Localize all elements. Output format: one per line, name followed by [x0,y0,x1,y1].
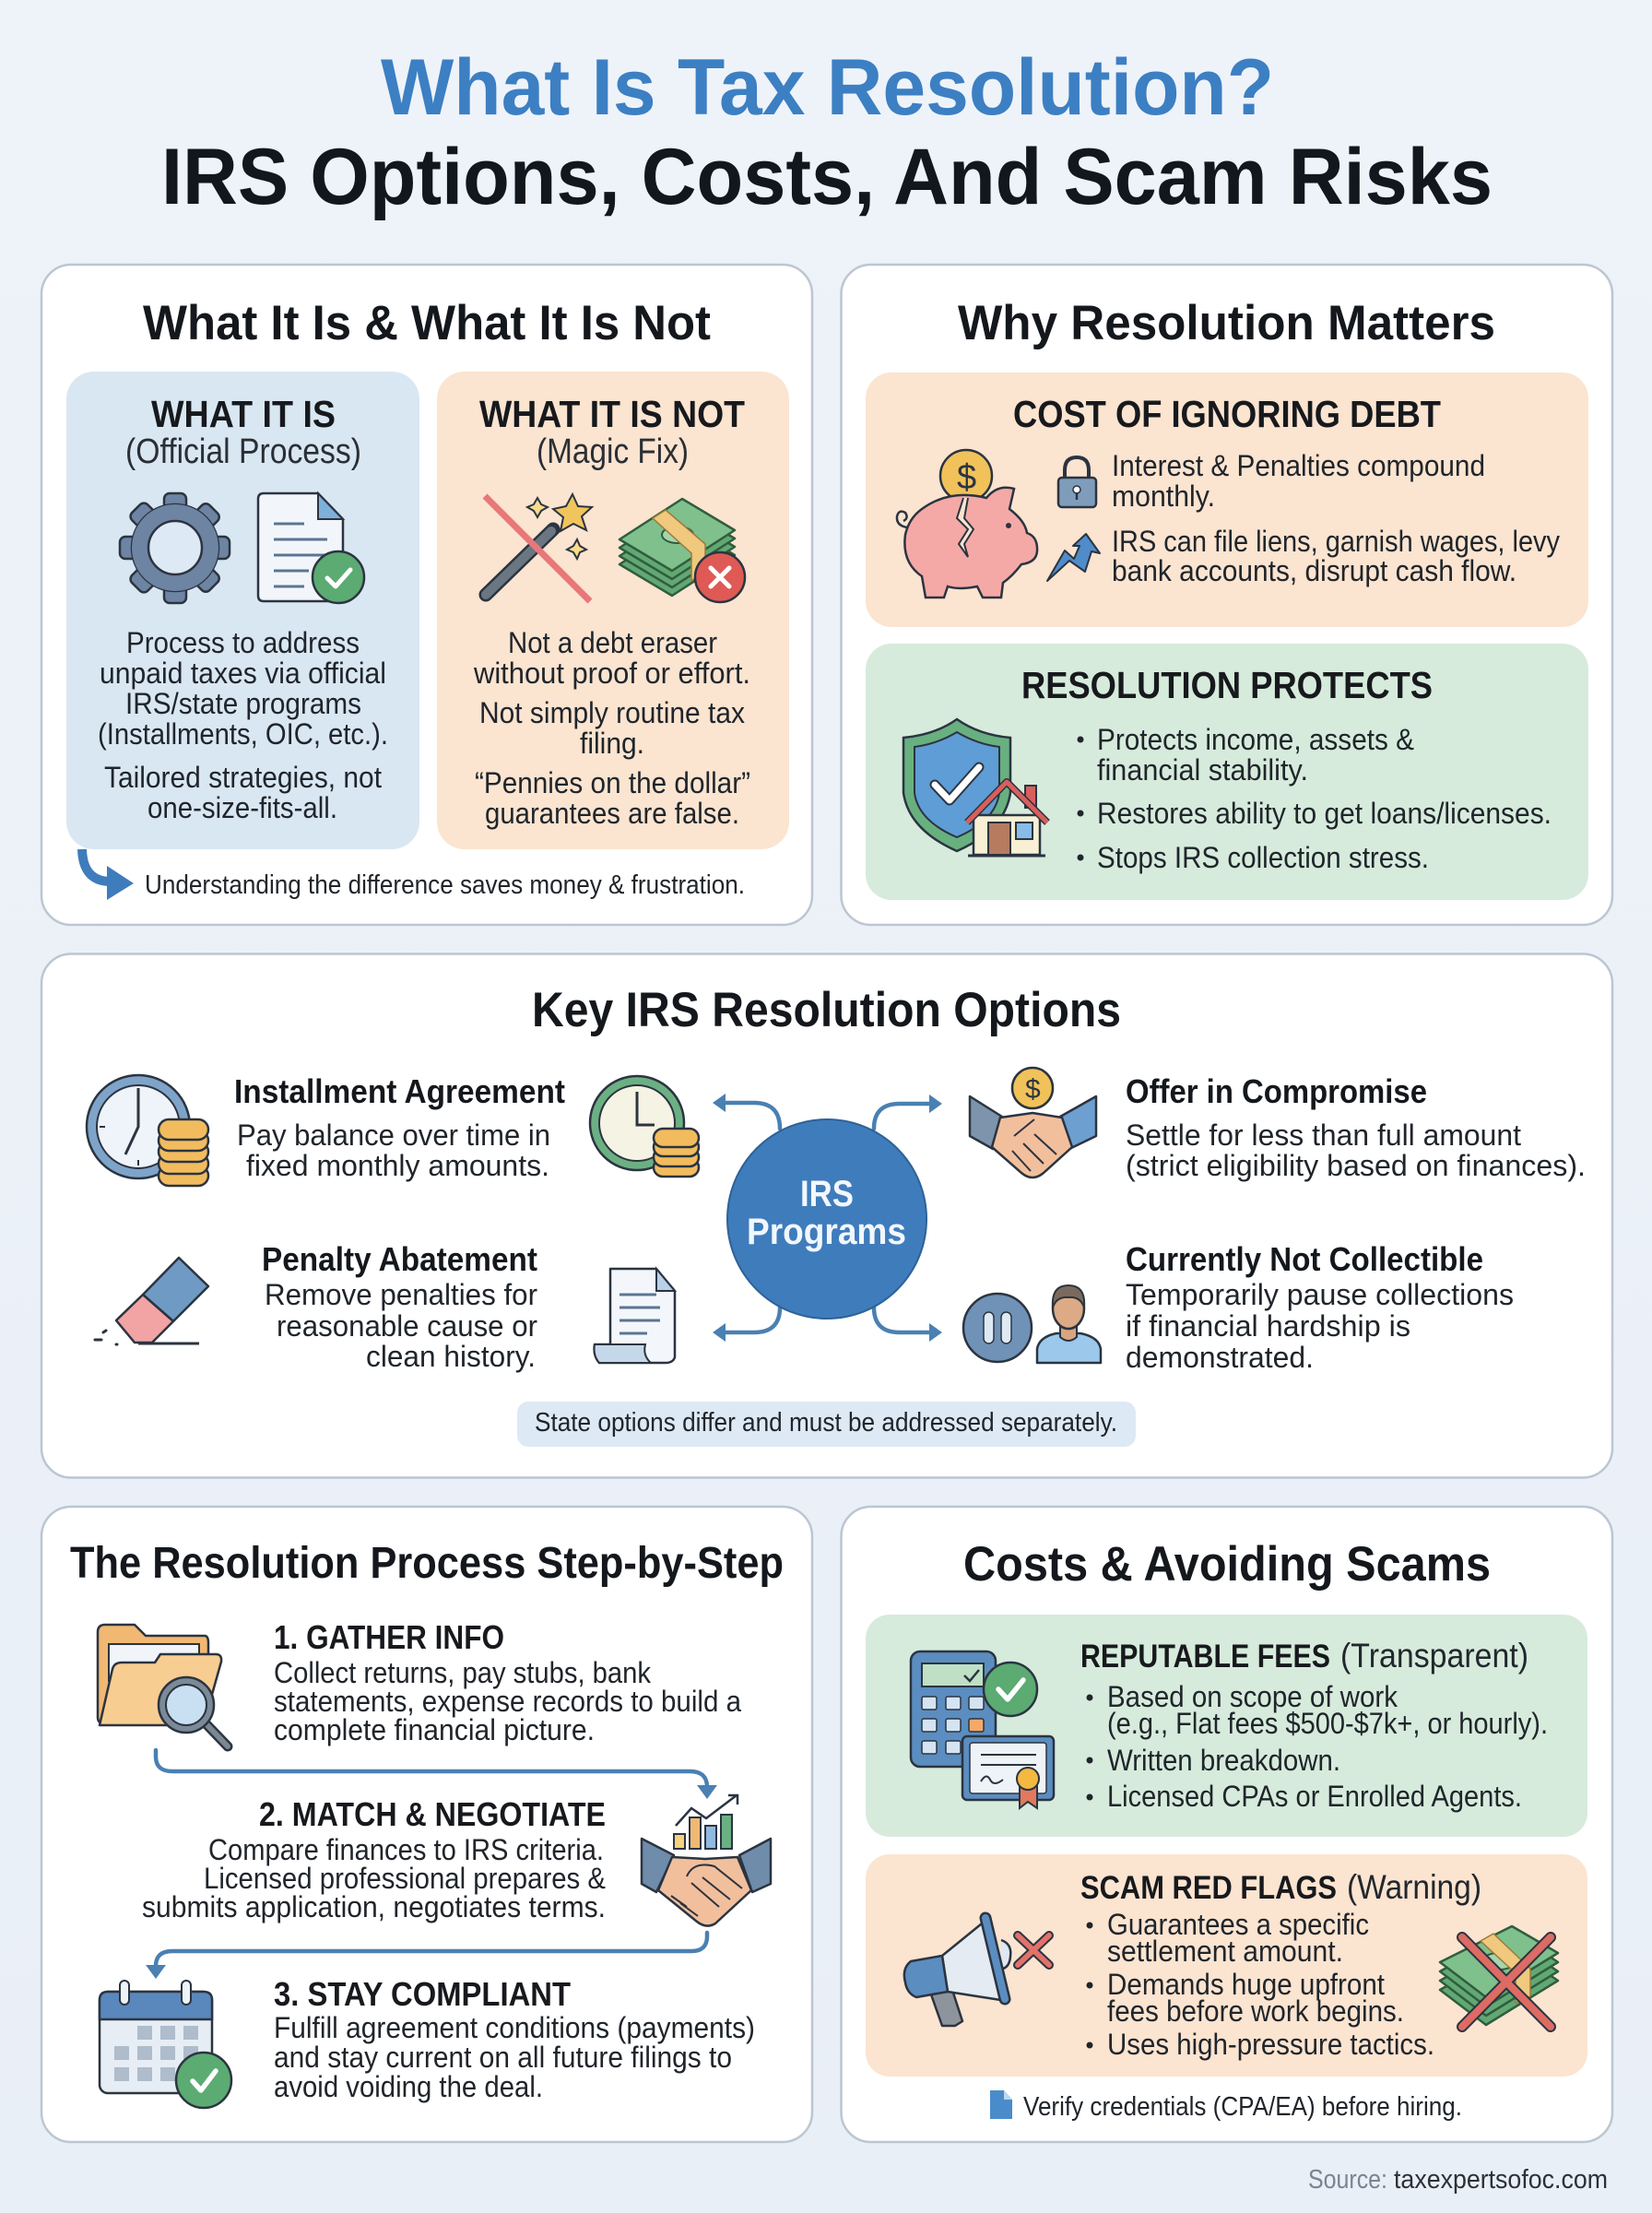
text: what it is body: Process to address [126,626,360,659]
text: what it is body [98,626,388,824]
icon: crossed-out money [1440,1926,1558,2027]
sub-panel: scam red flags [866,1854,1587,2077]
icon: folder with magnifying glass [98,1625,228,1746]
panel: costs and avoiding scams [841,1507,1612,2142]
panel: what it is and what it is not [41,265,812,925]
text: penalty abatement: Penalty Abatement [262,1240,537,1278]
text: currently not collectible [1126,1240,1514,1374]
panel: the resolution process step-by-step [41,1507,812,2142]
text: resolution protects bullets: Protects income, assets & [1097,723,1414,756]
icon: document with check [258,493,364,603]
text: reputable fees: Based on scope of work [1107,1680,1398,1713]
text: cost body [1112,449,1560,587]
chart node: irs programs circle: Programs [747,1212,906,1252]
text: offer in compromise: Settle for less than full amount [1126,1118,1521,1152]
text: step 3 [274,1975,755,2103]
text: scam red flags: Guarantees a specific [1107,1908,1369,1941]
icon: money stack with x [620,499,745,602]
sub-panel: resolution protects [866,644,1588,900]
icon: shield and house [903,719,1047,856]
text: what it is not body: “Pennies on the dollar” [475,766,750,799]
heading: what it is not: (Magic Fix) [537,432,689,471]
icon: megaphone with x [904,1918,1049,2026]
text: reputable fees: (Transparent) [1340,1637,1528,1675]
text: what it is body: (Installments, OIC, etc.). [98,717,388,751]
source line [1308,2165,1608,2195]
icon: clock and coins, blue [87,1075,208,1186]
text: penalty abatement: reasonable cause or [277,1309,537,1343]
arrow: step 2 to step 3 [146,1933,707,1979]
icon: eraser [95,1258,208,1344]
callout: state options note [517,1402,1136,1447]
text: resolution protects bullets: Restores ability to get loans/licenses. [1097,797,1552,830]
text: step 3: 3. STAY COMPLIANT [274,1975,571,2013]
title: What Is Tax Resolution? [381,43,1274,132]
text: step 2: Compare finances to IRS criteria. [208,1833,604,1866]
text: step 2: Licensed professional prepares & [204,1862,606,1895]
icon: broken piggy bank with coin: $ [957,458,976,497]
text: scam red flags: Uses high-pressure tactics. [1107,2028,1434,2061]
text: reputable fees: (e.g., Flat fees $500-$7k+, or hourly). [1107,1707,1548,1740]
heading: what it is: WHAT IT IS [151,393,336,435]
text: currently not collectible: if financial hardship is [1126,1309,1410,1343]
icon: rising arrow [1047,534,1100,581]
text: penalty abatement: clean history. [366,1340,536,1373]
text: what it is not body: Not simply routine tax [479,696,745,729]
title: IRS Options, Costs, And Scam Risks [161,133,1493,221]
text: resolution protects bullets: Stops IRS collection stress. [1097,841,1429,874]
text: installment agreement [234,1072,565,1182]
arrows: from center to options [713,1094,942,1342]
icon: arrowhead [107,866,134,900]
heading: key irs resolution options: Key IRS Resolution Options [532,983,1121,1037]
sub-panel: what it is not [437,372,789,849]
text: what it is body: Tailored strategies, not [104,761,382,794]
text: currently not collectible: demonstrated. [1126,1341,1314,1374]
icon: calendar with check [100,1981,231,2108]
text: installment agreement: fixed monthly amounts. [246,1149,549,1182]
icon: padlock [1058,457,1096,507]
text: step 1: statements, expense records to build a [274,1685,741,1718]
source line: Source: [1308,2165,1387,2195]
sub-panel: what it is [66,372,419,849]
text: step 2: 2. MATCH & NEGOTIATE [259,1795,606,1833]
text: step 3: and stay current on all future filings to [274,2041,732,2074]
text: resolution protects bullets: financial stability. [1097,753,1308,787]
text: cost body: monthly. [1112,479,1215,513]
text: currently not collectible: Currently Not Collectible [1126,1240,1483,1278]
text: offer in compromise: Offer in Compromise [1126,1072,1427,1110]
text: reputable fees: Licensed CPAs or Enrolled Agents. [1107,1780,1522,1813]
sub-panel: cost of ignoring debt [866,373,1588,627]
icon: calculator, check and certificate [911,1651,1054,1808]
text: step 3: Fulfill agreement conditions (payments) [274,2011,755,2044]
text: scam red flags: (Warning) [1347,1868,1481,1906]
text: what it is not body: Not a debt eraser [508,626,717,659]
panel: key irs resolution options [41,953,1612,1477]
text: scam red flags: fees before work begins. [1107,1994,1404,2028]
text: step 3: avoid voiding the deal. [274,2070,543,2103]
chart node: irs programs circle [727,1119,926,1319]
text: reputable fees: REPUTABLE FEES [1080,1639,1330,1675]
text: step 2 [142,1795,606,1923]
heading: resolution process: The Resolution Process Step-by-Step [70,1539,784,1588]
text: scam red flags: SCAM RED FLAGS [1080,1870,1337,1906]
text: scam red flags: settlement amount. [1107,1935,1343,1968]
icon: handshake with coin: $ [1025,1074,1041,1105]
text: what it is body: unpaid taxes via official [100,657,386,690]
icon: pause button and person [963,1285,1101,1363]
icon: handshake with coin [970,1068,1096,1178]
heading: what it is and is not: What It Is & What It Is Not [143,296,711,350]
callout: understanding the difference: Understanding the difference saves money & frustration. [145,870,745,900]
text: what it is not body: guarantees are false. [485,797,739,830]
text: what it is not body: filing. [580,727,644,760]
text: what it is not body [473,626,750,830]
text: step 1: 1. GATHER INFO [274,1618,504,1656]
panel: why resolution matters [841,265,1612,925]
heading: resolution protects: RESOLUTION PROTECTS [1021,664,1433,706]
text: cost body: bank accounts, disrupt cash flow. [1112,554,1516,587]
text: reputable fees [1080,1637,1548,1813]
text: installment agreement: Installment Agreement [234,1072,565,1110]
heading: why resolution matters: Why Resolution Matters [958,296,1495,350]
heading: what it is not: WHAT IT IS NOT [479,393,745,435]
arrow: step 1 to step 2 [156,1750,717,1799]
heading: what it is: (Official Process) [125,432,361,471]
text: step 1: Collect returns, pay stubs, bank [274,1656,652,1689]
arrow: curved callout arrow [82,849,111,882]
text: installment agreement: Pay balance over time in [237,1118,550,1152]
text: what it is body: one-size-fits-all. [148,791,337,824]
text: step 2: submits application, negotiates terms. [142,1890,606,1923]
text: offer in compromise: (strict eligibility based on finances). [1126,1149,1586,1182]
text: what it is body: IRS/state programs [125,687,361,720]
text: resolution protects bullets [1077,723,1552,874]
title [161,43,1493,221]
icon: clock and coins, green [590,1076,699,1177]
source line: taxexpertsofoc.com [1394,2165,1608,2195]
text: step 1: complete financial picture. [274,1713,595,1746]
callout: verify credentials: Verify credentials (CPA/EA) before hiring. [1023,2092,1462,2122]
heading: cost of ignoring debt: COST OF IGNORING DEBT [1013,393,1441,435]
chart node: irs programs circle: IRS [800,1174,854,1214]
sub-panel: reputable fees [866,1615,1587,1837]
heading: costs and scams: Costs & Avoiding Scams [963,1537,1491,1592]
text: penalty abatement [262,1240,537,1373]
heading: what it is [125,393,361,471]
heading: what it is not [479,393,745,471]
text: currently not collectible: Temporarily pause collections [1126,1278,1514,1311]
text: cost body: Interest & Penalties compound [1112,449,1485,482]
text: offer in compromise [1126,1072,1586,1182]
callout: state options note: State options differ and must be addressed separately. [535,1408,1117,1438]
text: cost body: IRS can file liens, garnish wages, levy [1112,525,1560,558]
icon: crossed-out magic wand [485,494,592,601]
icon: scroll document [595,1269,675,1363]
icon: handshake with bar chart [642,1795,771,1926]
text: what it is not body: without proof or effort. [473,657,750,690]
text: scam red flags: Demands huge upfront [1107,1968,1385,2001]
text: step 1 [274,1618,741,1746]
text: reputable fees: Written breakdown. [1107,1744,1340,1777]
text: penalty abatement: Remove penalties for [265,1278,537,1311]
text: scam red flags [1080,1868,1481,2061]
icon: broken piggy bank with coin [897,450,1037,598]
icon: gear [120,493,230,603]
